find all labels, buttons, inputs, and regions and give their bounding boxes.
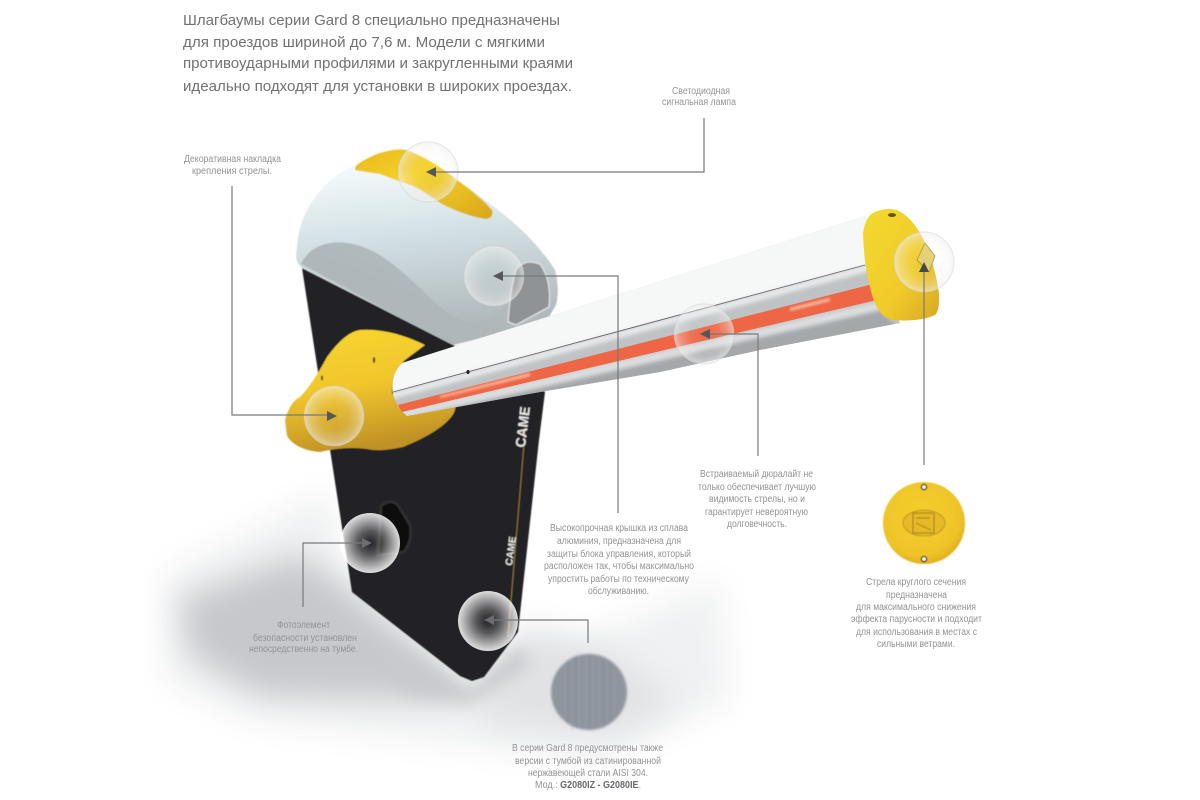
lens: cap — [464, 246, 524, 306]
logo upper: CAME — [512, 405, 533, 448]
label: LED strip: видимость стрелы, но и — [709, 494, 805, 505]
boom soft shading bands — [392, 265, 896, 416]
end cap screw — [888, 213, 896, 217]
callout: end cap leader — [919, 262, 929, 465]
cap shaded lobe — [301, 242, 546, 345]
lens: LED strip — [674, 304, 734, 364]
lens: end cap — [894, 232, 954, 292]
callout: LED strip leader — [700, 329, 758, 456]
yellow seam line — [508, 420, 526, 637]
lens: bracket — [304, 386, 364, 446]
lens: photocell — [340, 513, 400, 573]
label: photocell — [249, 620, 358, 655]
aluminium cap — [296, 159, 558, 345]
label: photocell: безопасности установлен — [253, 632, 357, 644]
cap service hatch — [508, 262, 550, 325]
boom LED highlight — [440, 373, 530, 398]
icon: yellow boom end disc — [883, 482, 965, 564]
label: LED strip: только обеспечивает лучшую — [698, 481, 816, 493]
label: stainless version — [512, 743, 663, 791]
label: round boom: для использования в местах с — [856, 627, 977, 638]
label: bracket cover — [184, 154, 281, 177]
label: aluminium cap — [544, 523, 694, 597]
label: aluminium cap: обслуживанию. — [588, 585, 649, 597]
label: aluminium cap: алюминия, предназначена для — [557, 536, 681, 547]
label: aluminium cap: защиты блока управления, который — [547, 548, 691, 560]
callout: bracket leader — [232, 186, 337, 421]
photocell recess — [378, 502, 411, 555]
label: signal lamp: сигнальная лампа — [662, 97, 736, 108]
boom upper white band — [392, 216, 866, 392]
boom LED highlight right — [790, 298, 830, 311]
callout: cap leader — [493, 271, 618, 513]
boom bracket — [285, 330, 456, 452]
label: stainless version: версии с тумбой из сатинированной — [515, 755, 661, 767]
intro heading: противоударными профилями и закругленными краями — [183, 55, 573, 72]
lens: stainless — [458, 591, 518, 651]
black pedestal — [302, 268, 545, 681]
boom black seam — [393, 265, 865, 392]
intro heading — [183, 12, 573, 95]
label: aluminium cap: упростить работы по техническому — [548, 573, 689, 585]
label: bracket cover: Декоративная накладка — [184, 154, 281, 165]
label: round boom — [851, 577, 982, 650]
label: aluminium cap: расположен так, чтобы максимально — [544, 560, 694, 572]
callout: photocell leader — [303, 538, 372, 607]
barrier cabinet — [285, 150, 558, 681]
callout: stainless leader — [484, 615, 588, 643]
label: round boom: Стрела круглого сечения — [866, 577, 966, 588]
label: stainless version: Мод.: G2080IZ - G2080IE. — [535, 780, 641, 791]
label: LED strip: Встраиваемый дюралайт не — [700, 469, 813, 480]
bracket screw holes — [373, 357, 375, 363]
label: LED strip: гарантирует невероятную — [705, 507, 808, 518]
label: round boom: эффекта парусности и подходит — [851, 613, 982, 625]
intro heading: для проездов шириной до 7,6 м. Модели с мягкими — [183, 34, 545, 51]
yellow end cap — [863, 209, 939, 320]
label: LED strip — [698, 469, 816, 530]
logo lower: CAME — [504, 535, 519, 566]
signal lamp — [355, 150, 492, 219]
magnifier lenses — [304, 142, 954, 651]
seam dot — [466, 370, 470, 374]
label: stainless version: нержавеющей стали AISI 304. — [528, 768, 648, 779]
label: round boom: для максимального снижения — [856, 602, 976, 613]
lens: lamp — [398, 142, 458, 202]
boom body — [392, 216, 900, 416]
ground shadow — [0, 400, 730, 800]
intro heading: идеально подходят для установки в широких проездах. — [183, 78, 572, 95]
label: photocell: Фотоэлемент — [277, 620, 330, 631]
label: signal lamp — [662, 86, 736, 108]
callout: lamp leader — [426, 118, 704, 177]
boom LED strip — [398, 284, 877, 412]
label: bracket cover: крепления стрелы. — [192, 166, 272, 177]
label: round boom: предназначена — [886, 590, 947, 601]
label: LED strip: долговечность. — [727, 519, 787, 530]
end cap insert — [917, 243, 935, 272]
label: aluminium cap: Высокопрочная крышка из сплава — [550, 523, 688, 534]
label: signal lamp: Светодиодная — [672, 86, 730, 97]
icon: brushed steel disc — [551, 654, 627, 731]
boom arm — [392, 209, 940, 416]
intro heading: Шлагбаумы серии Gard 8 специально предназначены — [183, 12, 560, 29]
label: photocell: непосредственно на тумбе. — [249, 643, 358, 655]
label: round boom: сильными ветрами. — [877, 639, 955, 650]
label: stainless version: В серии Gard 8 предусмотрены также — [512, 743, 663, 754]
